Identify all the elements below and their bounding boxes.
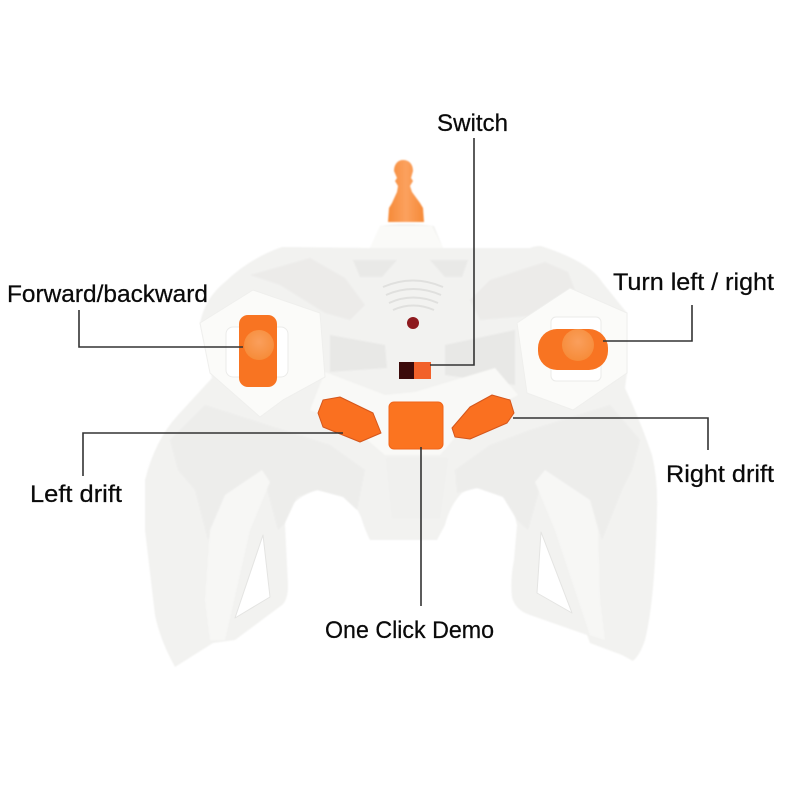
right stick: [517, 288, 627, 410]
leader lines: [79, 138, 708, 606]
wing panels: [170, 405, 365, 540]
right drift button: [452, 395, 514, 439]
label: Right drift: Right drift: [666, 461, 774, 488]
LED indicator: [407, 317, 419, 329]
label: Switch: Switch: [437, 110, 508, 137]
upper panels: [250, 258, 365, 320]
label: Turn left / right: Turn left / right: [613, 269, 774, 296]
speaker lines: [383, 280, 443, 310]
switch: [399, 362, 431, 379]
label: Left drift: Left drift: [30, 481, 122, 508]
left drift button: [318, 397, 381, 442]
wing cut-out right: [537, 532, 572, 613]
controller body: [145, 224, 657, 667]
wing cut-out left: [235, 535, 270, 618]
controller: [145, 160, 657, 667]
antenna: [388, 160, 424, 222]
demo button: [389, 402, 443, 449]
left stick: [200, 290, 325, 417]
label: Forward/backward: Forward/backward: [7, 281, 208, 308]
label: One Click Demo: One Click Demo: [325, 617, 494, 644]
